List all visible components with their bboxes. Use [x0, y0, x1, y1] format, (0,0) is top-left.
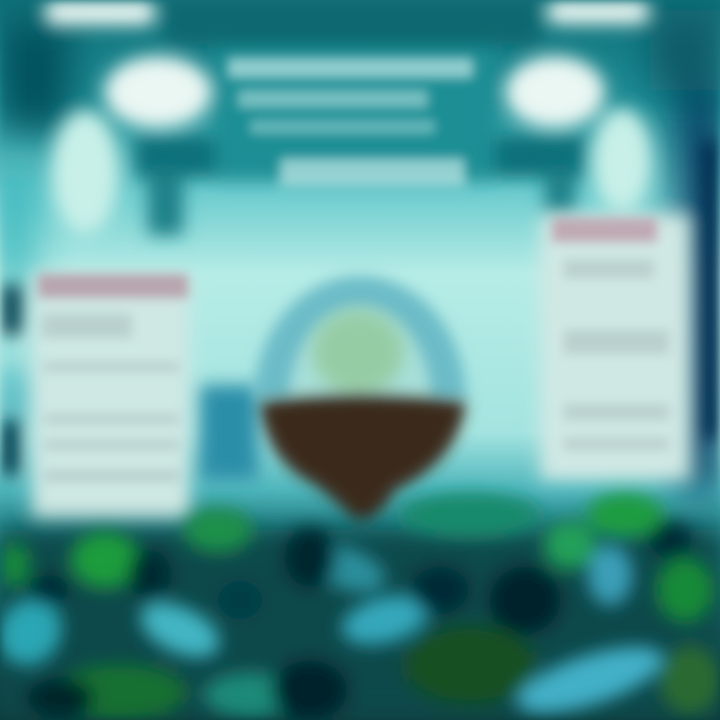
ceiling lights: [44, 0, 652, 234]
glass dome: [254, 276, 466, 400]
dark side walls: [0, 10, 720, 490]
right panel text: [564, 260, 669, 450]
left panel: [32, 274, 190, 520]
foliage leaves: [0, 493, 720, 720]
foliage base: [0, 530, 720, 720]
plant: [312, 310, 404, 394]
right panel heading: [552, 218, 657, 242]
left panel heading: [38, 274, 188, 298]
title text: [228, 58, 473, 186]
ceiling beams: [135, 0, 585, 235]
blue block behind globe: [200, 385, 258, 480]
right panel: [540, 214, 690, 480]
globe terrarium: [254, 276, 466, 521]
soil bowl: [260, 395, 466, 521]
wall shadows: [0, 140, 720, 475]
left panel text: [42, 314, 179, 482]
